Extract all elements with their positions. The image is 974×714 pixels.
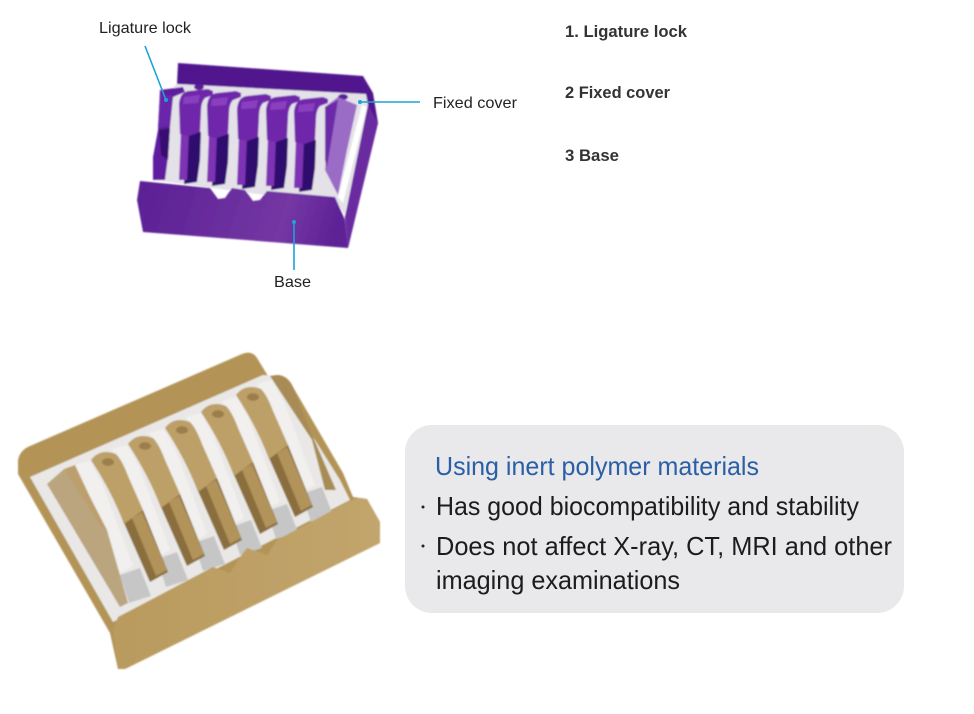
card heading: Using inert polymer materials	[435, 451, 759, 481]
bullet: imaging: imaging examinations	[436, 565, 680, 595]
bullet: biocompatibility: Has good biocompatibility and stability	[436, 491, 859, 521]
label: Ligature lock	[99, 20, 191, 102]
label: Fixed cover	[358, 95, 517, 112]
parts list	[565, 22, 688, 165]
bullet: imaging: Does not affect X-ray, CT, MRI and other	[436, 531, 892, 561]
card background	[405, 425, 904, 613]
label: Fixed cover: Fixed cover	[433, 95, 517, 112]
list item 2: 2 Fixed cover	[565, 83, 670, 102]
label: Ligature lock: Ligature lock	[99, 20, 191, 37]
bullet: imaging	[422, 531, 892, 595]
gold clip cartridge photo	[18, 353, 380, 669]
purple clip cartridge photo	[137, 63, 378, 248]
list item 3: 3 Base	[565, 146, 619, 165]
list item 1: 1. Ligature lock	[565, 22, 688, 41]
label: Base	[274, 220, 311, 291]
info card: inert polymer materials	[405, 425, 904, 613]
label: Base: Base	[274, 274, 311, 291]
